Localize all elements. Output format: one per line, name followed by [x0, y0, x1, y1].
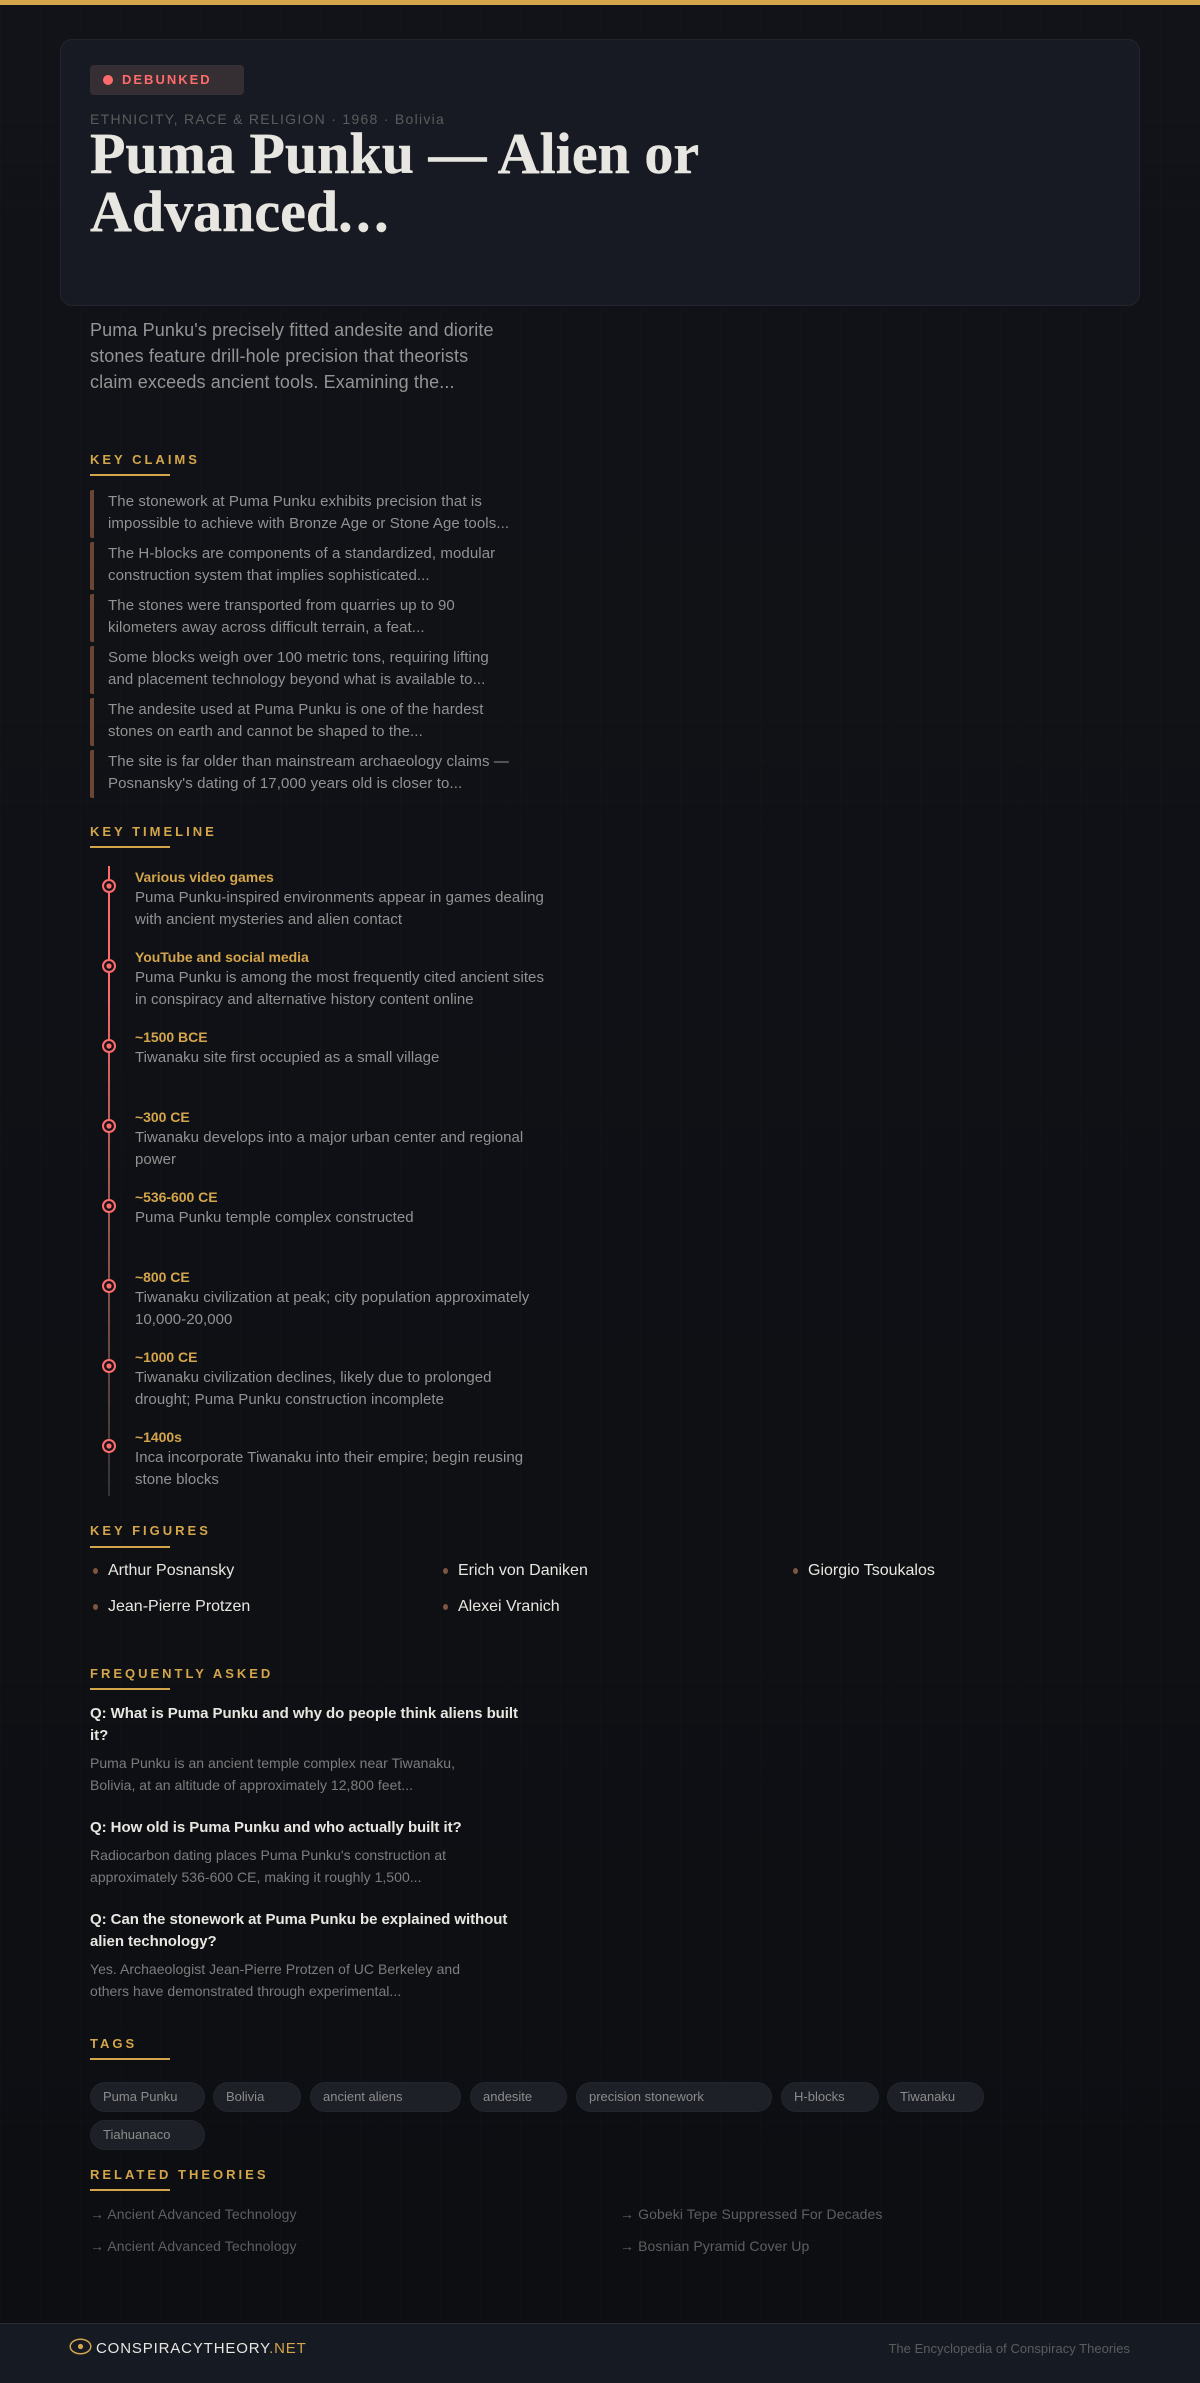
- claim 5: [90, 698, 530, 746]
- heading: key figures: KEY FIGURES: [90, 1523, 211, 1538]
- panel: timeline: [102, 866, 544, 1496]
- question 2: Q: How old is Puma Punku and who actually built it?: [90, 1819, 462, 1836]
- tag: [470, 2082, 567, 2112]
- claim 3: The stones were transported from quarries up to 90: [108, 597, 455, 614]
- related link: → Ancient Advanced Technology: [90, 2238, 297, 2254]
- related link: → Gobeki Tepe Suppressed For Decades: [620, 2206, 882, 2222]
- figure: Arthur Posnansky: Arthur Posnansky: [108, 1562, 234, 1579]
- claim 2: construction system that implies sophisticated...: [108, 567, 430, 584]
- panel: FAQ: [90, 1705, 518, 1999]
- category meta line: ETHNICITY, RACE & RELIGION · 1968 · Bolivia: [90, 111, 445, 127]
- heading: tags: TAGS: [90, 2036, 137, 2051]
- event: 300 CE: power: [135, 1151, 176, 1168]
- tag: [781, 2082, 879, 2112]
- tag: [213, 2082, 301, 2112]
- answer 1: [90, 1755, 455, 1793]
- claim 3: [90, 594, 530, 642]
- claim 6: [90, 750, 530, 798]
- tag: [887, 2082, 984, 2112]
- intro text: [90, 320, 494, 392]
- event: video games: with ancient mysteries and alien contact: [135, 911, 402, 928]
- event: video games: [102, 869, 544, 928]
- heading: key claims: KEY CLAIMS: [90, 452, 200, 467]
- event: 536-600 CE: ~536-600 CE: [135, 1189, 218, 1205]
- event: 1500 BCE: Tiwanaku site first occupied as a small village: [135, 1049, 439, 1066]
- tag: precision stonework: [589, 2089, 704, 2104]
- panel: key claims list: [90, 490, 509, 798]
- event: 1400s: [102, 1429, 523, 1488]
- tag: H-blocks: [794, 2089, 845, 2104]
- icon: status dot: [103, 75, 113, 85]
- answer 1: Bolivia, at an altitude of approximately 12,800 feet...: [90, 1777, 413, 1793]
- panel: hero: [60, 39, 1140, 306]
- event: 300 CE: [102, 1109, 523, 1168]
- logo wordmark: CONSPIRACYTHEORY.NET: [96, 2340, 307, 2357]
- claim 1: [90, 490, 530, 538]
- tag: andesite: [483, 2089, 532, 2104]
- event: 1000 CE: [102, 1349, 492, 1408]
- event: 800 CE: ~800 CE: [135, 1269, 190, 1285]
- answer 3: [90, 1961, 460, 1999]
- title: Puma Punku — Alien or: [90, 121, 699, 186]
- event: youtube: [102, 949, 544, 1008]
- title: [90, 121, 699, 244]
- claim 4: Some blocks weigh over 100 metric tons, requiring lifting: [108, 649, 489, 666]
- question 3: alien technology?: [90, 1933, 217, 1950]
- claim 1: impossible to achieve with Bronze Age or Stone Age tools...: [108, 515, 509, 532]
- event: 1400s: ~1400s: [135, 1429, 182, 1445]
- event: 1400s: Inca incorporate Tiwanaku into their empire; begin reusing: [135, 1449, 523, 1466]
- event: 800 CE: 10,000-20,000: [135, 1311, 232, 1328]
- heading: key timeline: KEY TIMELINE: [90, 824, 217, 839]
- question 3: Q: Can the stonework at Puma Punku be explained without: [90, 1911, 507, 1928]
- question 1: Q: What is Puma Punku and why do people think aliens built: [90, 1705, 518, 1722]
- figure: Giorgio Tsoukalos: Giorgio Tsoukalos: [808, 1562, 935, 1579]
- related link: → Bosnian Pyramid Cover Up: [620, 2238, 809, 2254]
- event: 300 CE: Tiwanaku develops into a major urban center and regional: [135, 1129, 523, 1146]
- event: 800 CE: Tiwanaku civilization at peak; city population approximately: [135, 1289, 529, 1306]
- claim 6: The site is far older than mainstream archaeology claims —: [108, 753, 509, 770]
- claim 3: kilometers away across difficult terrain, a feat...: [108, 619, 425, 636]
- event: 300 CE: ~300 CE: [135, 1109, 190, 1125]
- panel: related theories: [90, 2206, 882, 2254]
- answer 3: Yes. Archaeologist Jean-Pierre Protzen of UC Berkeley and: [90, 1961, 460, 1977]
- event: youtube: Puma Punku is among the most frequently cited ancient sites: [135, 969, 544, 986]
- event: 1500 BCE: [102, 1029, 439, 1066]
- answer 2: Radiocarbon dating places Puma Punku's construction at: [90, 1847, 446, 1863]
- claim 5: The andesite used at Puma Punku is one of the hardest: [108, 701, 484, 718]
- claim 2: [90, 542, 530, 590]
- tagline: The Encyclopedia of Conspiracy Theories: [888, 2341, 1130, 2356]
- event: 1000 CE: ~1000 CE: [135, 1349, 197, 1365]
- event: youtube: YouTube and social media: [135, 949, 309, 965]
- tag: Tiahuanaco: [103, 2127, 170, 2142]
- icon: eye logo: [70, 2338, 92, 2354]
- claim 1: The stonework at Puma Punku exhibits precision that is: [108, 493, 482, 510]
- badge: debunked: [90, 65, 244, 95]
- intro text: stones feature drill-hole precision that theorists: [90, 346, 468, 366]
- tag: [576, 2082, 772, 2112]
- timeline spine: [108, 866, 110, 1496]
- event: 1500 BCE: ~1500 BCE: [135, 1029, 208, 1045]
- event: 536-600 CE: [102, 1189, 414, 1226]
- tag: Puma Punku: [103, 2089, 177, 2104]
- event: 1000 CE: drought; Puma Punku construction incomplete: [135, 1391, 444, 1408]
- event: 1000 CE: Tiwanaku civilization declines, likely due to prolonged: [135, 1369, 492, 1386]
- related link: → Ancient Advanced Technology: [90, 2206, 297, 2222]
- question 1: it?: [90, 1727, 108, 1744]
- question 3: [90, 1911, 508, 1950]
- panel: tags: [90, 2082, 984, 2150]
- title: Advanced...: [90, 179, 392, 244]
- heading: related theories: RELATED THEORIES: [90, 2167, 268, 2182]
- answer 2: approximately 536-600 CE, making it roughly 1,500...: [90, 1869, 422, 1885]
- answer 2: [90, 1847, 446, 1885]
- tag: Bolivia: [226, 2089, 264, 2104]
- event: youtube: in conspiracy and alternative history content online: [135, 991, 474, 1008]
- intro text: Puma Punku's precisely fitted andesite and diorite: [90, 320, 494, 340]
- event: video games: Various video games: [135, 869, 274, 885]
- footer: [0, 2323, 1200, 2383]
- heading: frequently asked: FREQUENTLY ASKED: [90, 1666, 273, 1681]
- answer 3: others have demonstrated through experimental...: [90, 1983, 401, 1999]
- claim 4: and placement technology beyond what is available to...: [108, 671, 485, 688]
- figure: Jean-Pierre Protzen: Jean-Pierre Protzen: [108, 1598, 250, 1615]
- tag: Tiwanaku: [900, 2089, 955, 2104]
- figure: Alexei Vranich: Alexei Vranich: [458, 1598, 560, 1615]
- tag: ancient aliens: [323, 2089, 402, 2104]
- claim 2: The H-blocks are components of a standardized, modular: [108, 545, 495, 562]
- tag: [90, 2120, 205, 2150]
- figure: Erich von Daniken: Erich von Daniken: [458, 1562, 588, 1579]
- intro text: claim exceeds ancient tools. Examining the...: [90, 372, 455, 392]
- tag: [310, 2082, 461, 2112]
- claim 6: Posnansky's dating of 17,000 years old is closer to...: [108, 775, 462, 792]
- badge label: DEBUNKED: [122, 72, 212, 87]
- claim 4: [90, 646, 530, 694]
- panel: key figures: [93, 1562, 935, 1615]
- event: video games: Puma Punku-inspired environments appear in games dealing: [135, 889, 544, 906]
- event: 1400s: stone blocks: [135, 1471, 219, 1488]
- claim 5: stones on earth and cannot be shaped to the...: [108, 723, 423, 740]
- question 1: [90, 1705, 518, 1744]
- event: 800 CE: [102, 1269, 530, 1328]
- event: 536-600 CE: Puma Punku temple complex constructed: [135, 1209, 414, 1226]
- tag: [90, 2082, 205, 2112]
- top accent bar: [0, 0, 1200, 5]
- answer 1: Puma Punku is an ancient temple complex near Tiwanaku,: [90, 1755, 455, 1771]
